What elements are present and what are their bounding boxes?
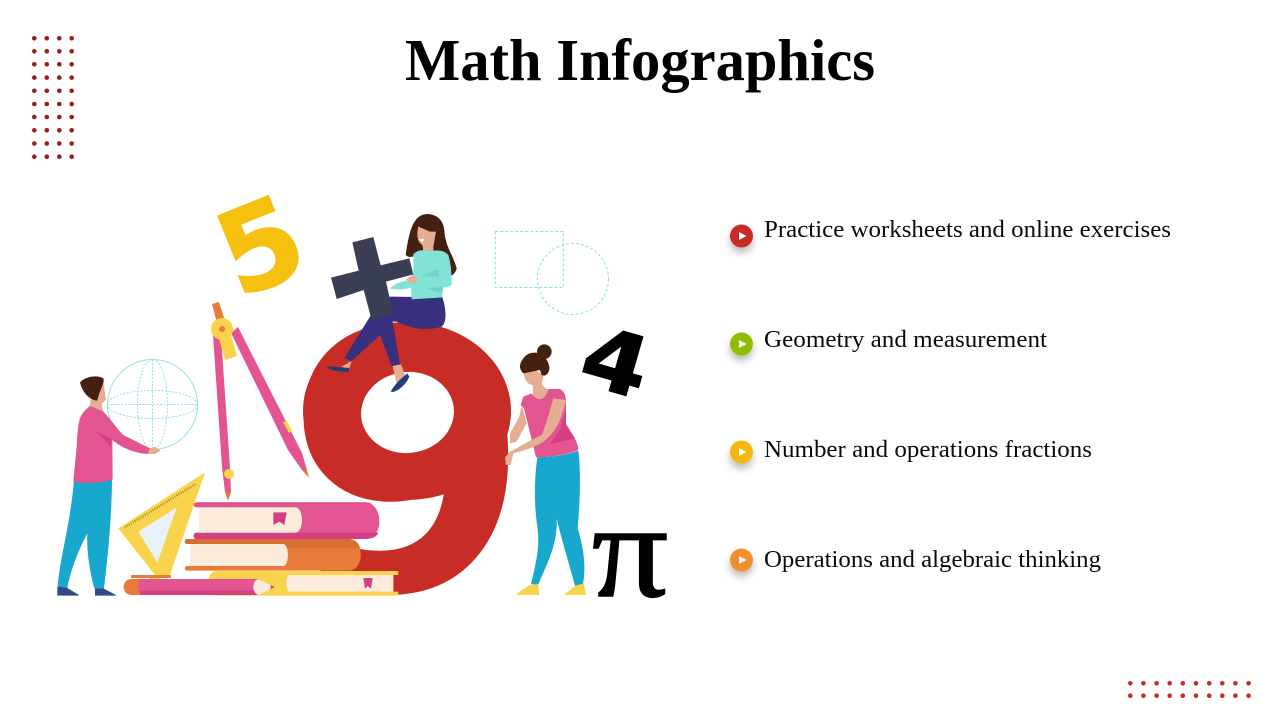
man shoes	[57, 587, 116, 596]
trousers	[344, 297, 446, 366]
marker: orange play bullet	[730, 548, 753, 572]
top	[521, 389, 578, 457]
woman pushing the nine	[505, 344, 586, 595]
shoes	[516, 583, 586, 595]
feet	[342, 361, 405, 384]
decorative dot grid bottom right	[1128, 681, 1251, 698]
back arm	[510, 405, 527, 443]
wireframe globe	[108, 360, 198, 450]
text: number and operations: Number and operations fractions	[764, 437, 1092, 463]
item 2	[730, 327, 1047, 356]
text: practice worksheets: Practice worksheets and online exercises	[764, 217, 1171, 243]
middle orange book	[185, 539, 361, 571]
text: operations and algebraic thinking: Operations and algebraic thinking	[764, 547, 1101, 573]
man holding globe	[57, 376, 161, 596]
stack of books, ruler and pencil	[118, 472, 398, 596]
item 1	[730, 217, 1171, 248]
shoes	[327, 367, 409, 392]
topic list	[730, 217, 1171, 573]
face	[417, 227, 436, 251]
plus sign	[331, 237, 413, 320]
man shirt	[73, 406, 150, 483]
bottom yellow book	[208, 571, 398, 596]
man trousers	[58, 478, 112, 588]
title: Math Infographics	[405, 27, 875, 93]
woman sitting with plus sign	[327, 214, 457, 392]
item 3	[730, 437, 1092, 464]
math illustration	[57, 170, 668, 676]
pencil	[124, 579, 275, 595]
numeral five: 5	[198, 170, 324, 325]
numeral four: 4	[570, 307, 661, 419]
pi symbol: π	[592, 476, 668, 626]
front arm	[505, 398, 566, 465]
hand	[406, 275, 418, 283]
sweater	[390, 250, 452, 299]
text: geometry: Geometry and measurement	[764, 327, 1047, 353]
neck and face	[523, 365, 548, 400]
top pink book	[194, 502, 379, 539]
decorative dot grid top left	[32, 36, 74, 159]
item 4	[730, 547, 1101, 573]
compass tool	[211, 302, 309, 501]
triangle ruler	[118, 472, 205, 579]
numeral nine: 9	[285, 257, 531, 676]
long hair	[406, 214, 457, 277]
trousers	[531, 451, 584, 586]
marker: red play bullet	[730, 224, 753, 248]
marker: yellow play bullet	[730, 440, 753, 464]
hair	[520, 344, 552, 376]
man skin	[90, 382, 161, 454]
dashed square and circle	[495, 232, 608, 314]
marker: green play bullet	[730, 332, 753, 356]
man hair	[80, 376, 104, 401]
